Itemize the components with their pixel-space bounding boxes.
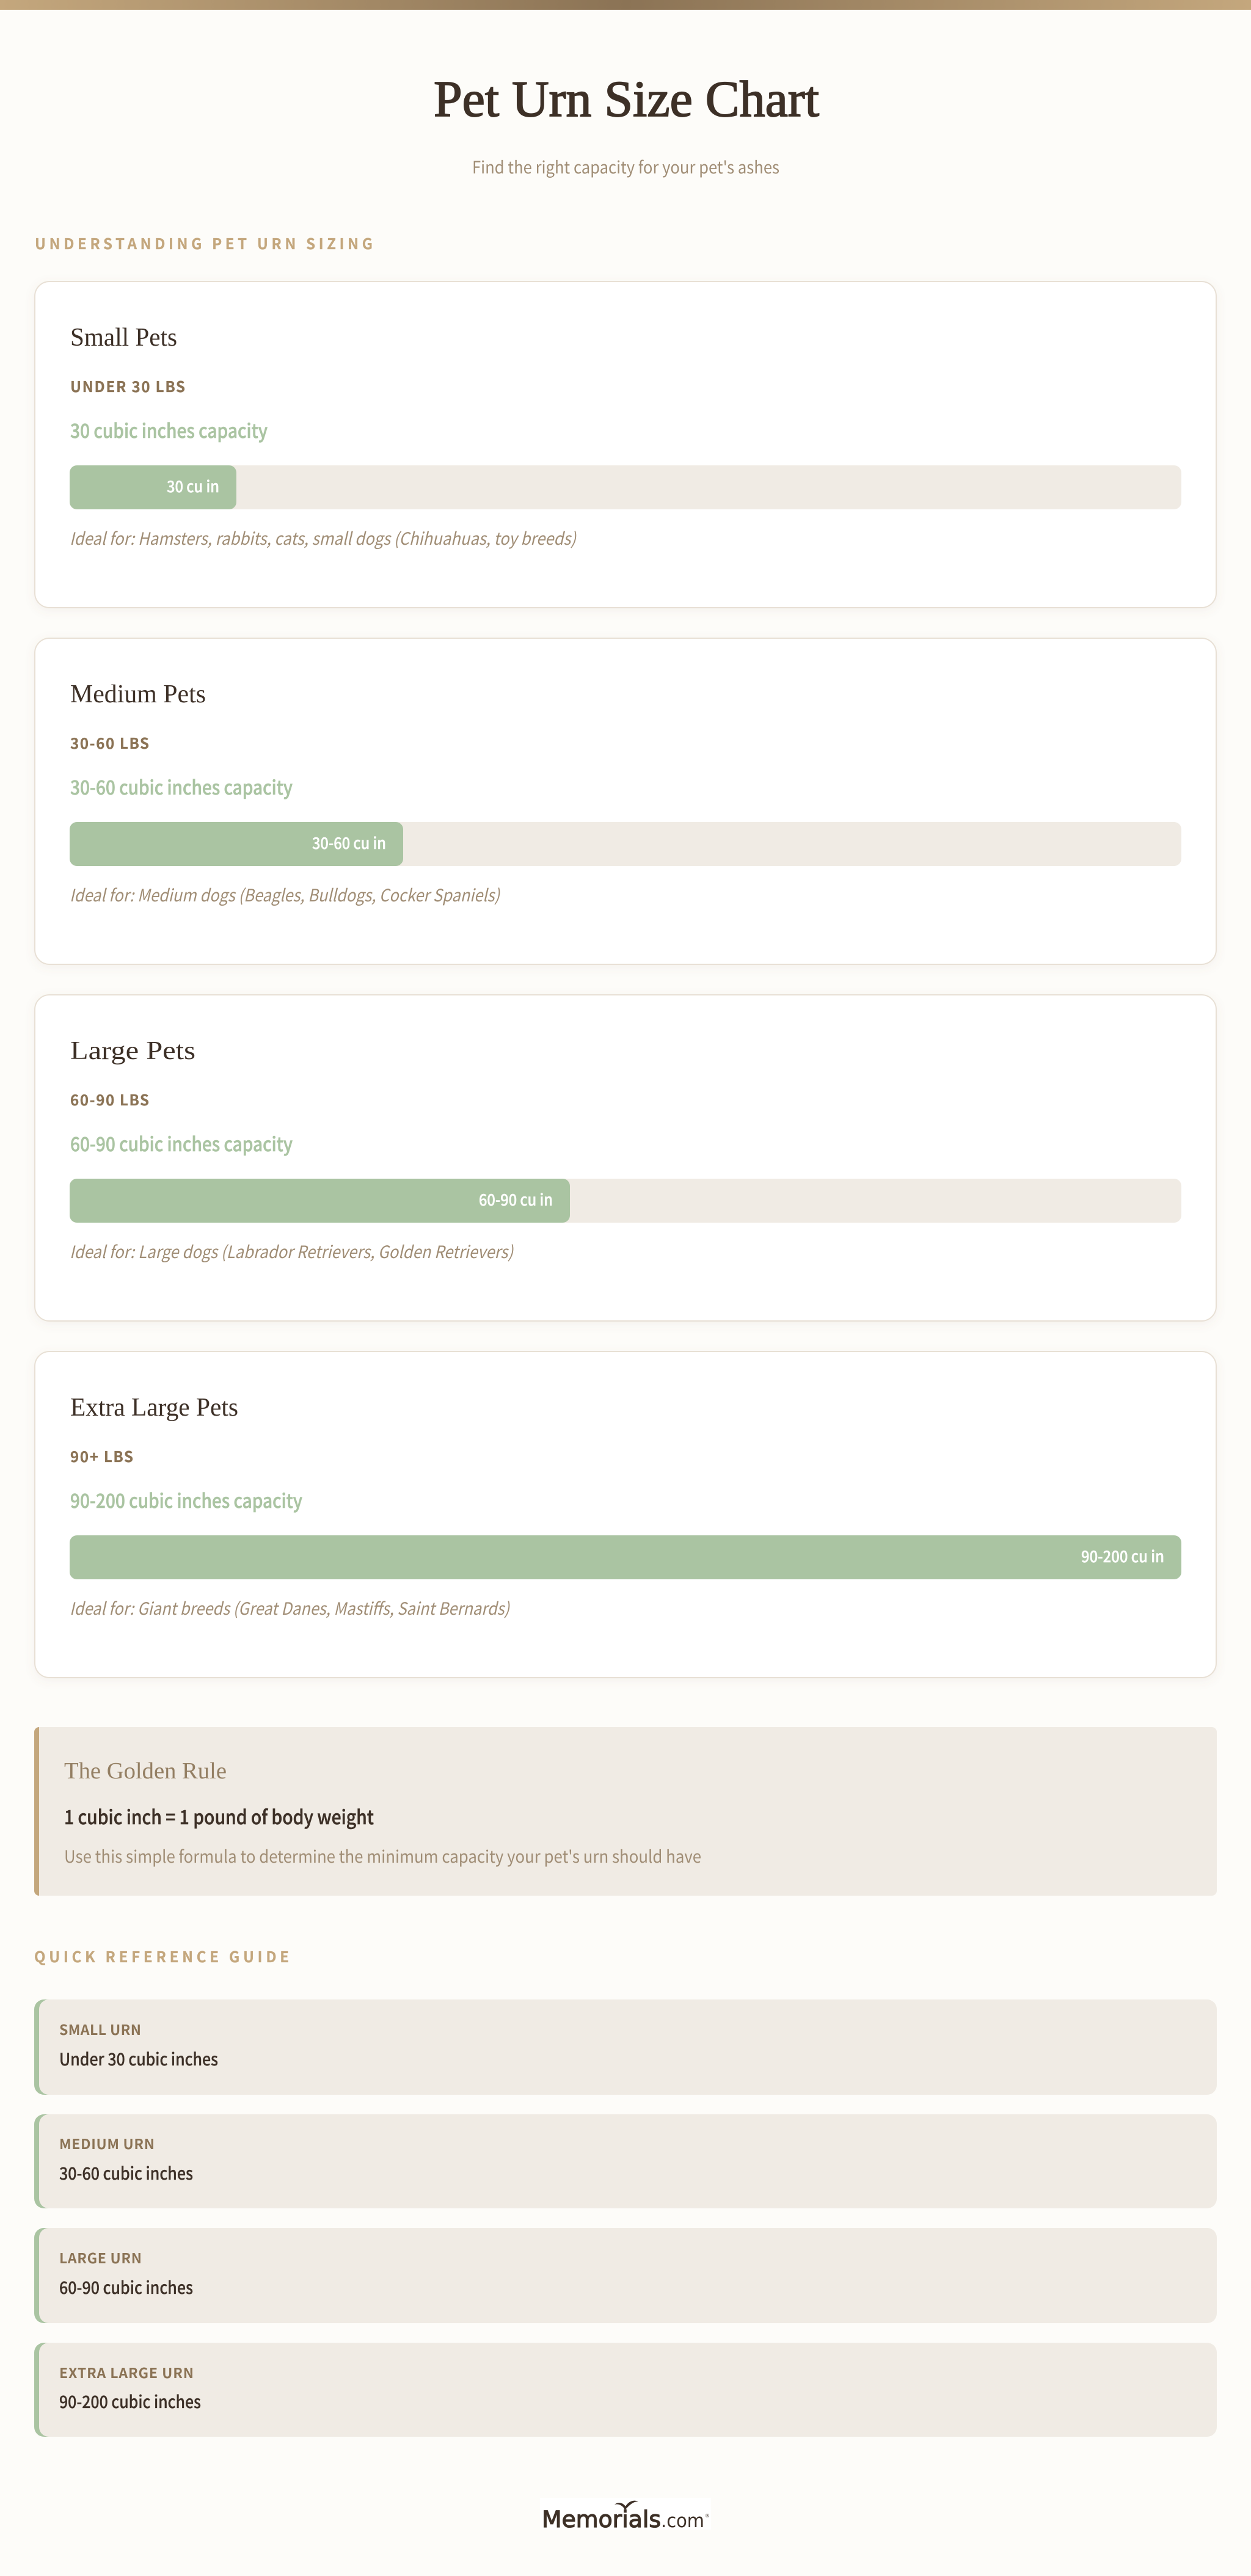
item label: LARGE URN <box>59 2247 142 2268</box>
item value: 90-200 cubic inches <box>59 2389 201 2414</box>
explanation: Use this simple formula to determine the minimum capacity your pet's urn should have <box>64 1844 701 1868</box>
panel: large pets <box>35 995 1216 1321</box>
item background <box>39 1999 1217 2095</box>
card background <box>35 1352 1216 1678</box>
item value: 30-60 cubic inches <box>59 2161 193 2185</box>
card heading: Medium Pets <box>70 680 206 708</box>
ideal for: Ideal for: Hamsters, rabbits, cats, small dogs (Chihuahuas, toy breeds) <box>70 526 577 550</box>
callout heading: The Golden Rule <box>64 1758 227 1784</box>
logo background <box>540 2498 711 2530</box>
card heading: Large Pets <box>70 1037 195 1065</box>
reference item: extra large urn <box>34 2343 1217 2437</box>
item accent <box>34 2114 71 2208</box>
card background <box>35 638 1216 964</box>
capacity: 30 cubic inches capacity <box>70 416 268 444</box>
bar label: 90-200 cu in <box>1081 1545 1164 1567</box>
card background <box>35 995 1216 1321</box>
registered mark: ® <box>705 2513 710 2519</box>
item value: 60-90 cubic inches <box>59 2275 193 2299</box>
icon: bird <box>615 2501 638 2510</box>
top gradient bar <box>0 0 1251 10</box>
bar fill <box>70 465 236 509</box>
item background <box>39 2114 1217 2208</box>
item background <box>39 2343 1217 2437</box>
logo: Memorials.com <box>540 2498 711 2533</box>
bar label: 30-60 cu in <box>312 831 386 854</box>
section heading: quick reference: QUICK REFERENCE GUIDE <box>34 1945 289 1967</box>
reference item: large urn <box>34 2228 1217 2323</box>
reference item: small urn <box>34 1999 1217 2095</box>
logo wordmark: Memorials <box>542 2506 661 2533</box>
weight range: 90+ LBS <box>70 1445 133 1466</box>
ideal for: Ideal for: Medium dogs (Beagles, Bulldogs, Cocker Spaniels) <box>70 882 500 907</box>
item value: Under 30 cubic inches <box>59 2047 218 2071</box>
callout accent <box>34 1727 59 1896</box>
formula: 1 cubic inch = 1 pound of body weight <box>64 1802 374 1830</box>
card heading: Small Pets <box>70 324 177 352</box>
capacity: 30-60 cubic inches capacity <box>70 773 293 801</box>
title: Pet Urn Size Chart <box>434 71 819 128</box>
bar track <box>70 1179 1181 1223</box>
reference item: medium urn <box>34 2114 1217 2208</box>
card heading: Extra Large Pets <box>70 1394 238 1422</box>
subtitle: Find the right capacity for your pet's ashes <box>472 155 779 179</box>
item label: SMALL URN <box>59 2018 141 2039</box>
ideal for: Ideal for: Giant breeds (Great Danes, Mastiffs, Saint Bernards) <box>70 1596 510 1620</box>
capacity: 90-200 cubic inches capacity <box>70 1486 302 1514</box>
item label: MEDIUM URN <box>59 2133 155 2153</box>
weight range: 30-60 LBS <box>70 732 149 753</box>
bar fill <box>70 822 403 866</box>
item accent <box>34 1999 71 2095</box>
item accent <box>34 2343 71 2437</box>
ideal for: Ideal for: Large dogs (Labrador Retrievers, Golden Retrievers) <box>70 1239 514 1264</box>
callout: the golden rule <box>34 1727 1217 1896</box>
logo domain: .com <box>661 2510 704 2532</box>
weight range: UNDER 30 LBS <box>70 375 185 396</box>
item background <box>39 2228 1217 2323</box>
bar track <box>70 822 1181 866</box>
bar label: 60-90 cu in <box>479 1188 553 1210</box>
bar label: 30 cu in <box>167 475 219 497</box>
panel: extra large pets <box>35 1352 1216 1678</box>
capacity: 60-90 cubic inches capacity <box>70 1129 293 1157</box>
panel: small pets <box>35 282 1216 608</box>
weight range: 60-90 LBS <box>70 1088 149 1110</box>
section heading: understanding sizing: UNDERSTANDING PET URN SIZING <box>35 232 373 253</box>
item label: EXTRA LARGE URN <box>59 2362 194 2382</box>
card background <box>35 282 1216 608</box>
item accent <box>34 2228 71 2323</box>
bar fill <box>70 1179 570 1223</box>
callout background <box>39 1727 1217 1896</box>
bar fill <box>70 1535 1181 1579</box>
bar track <box>70 465 1181 509</box>
panel: medium pets <box>35 638 1216 964</box>
